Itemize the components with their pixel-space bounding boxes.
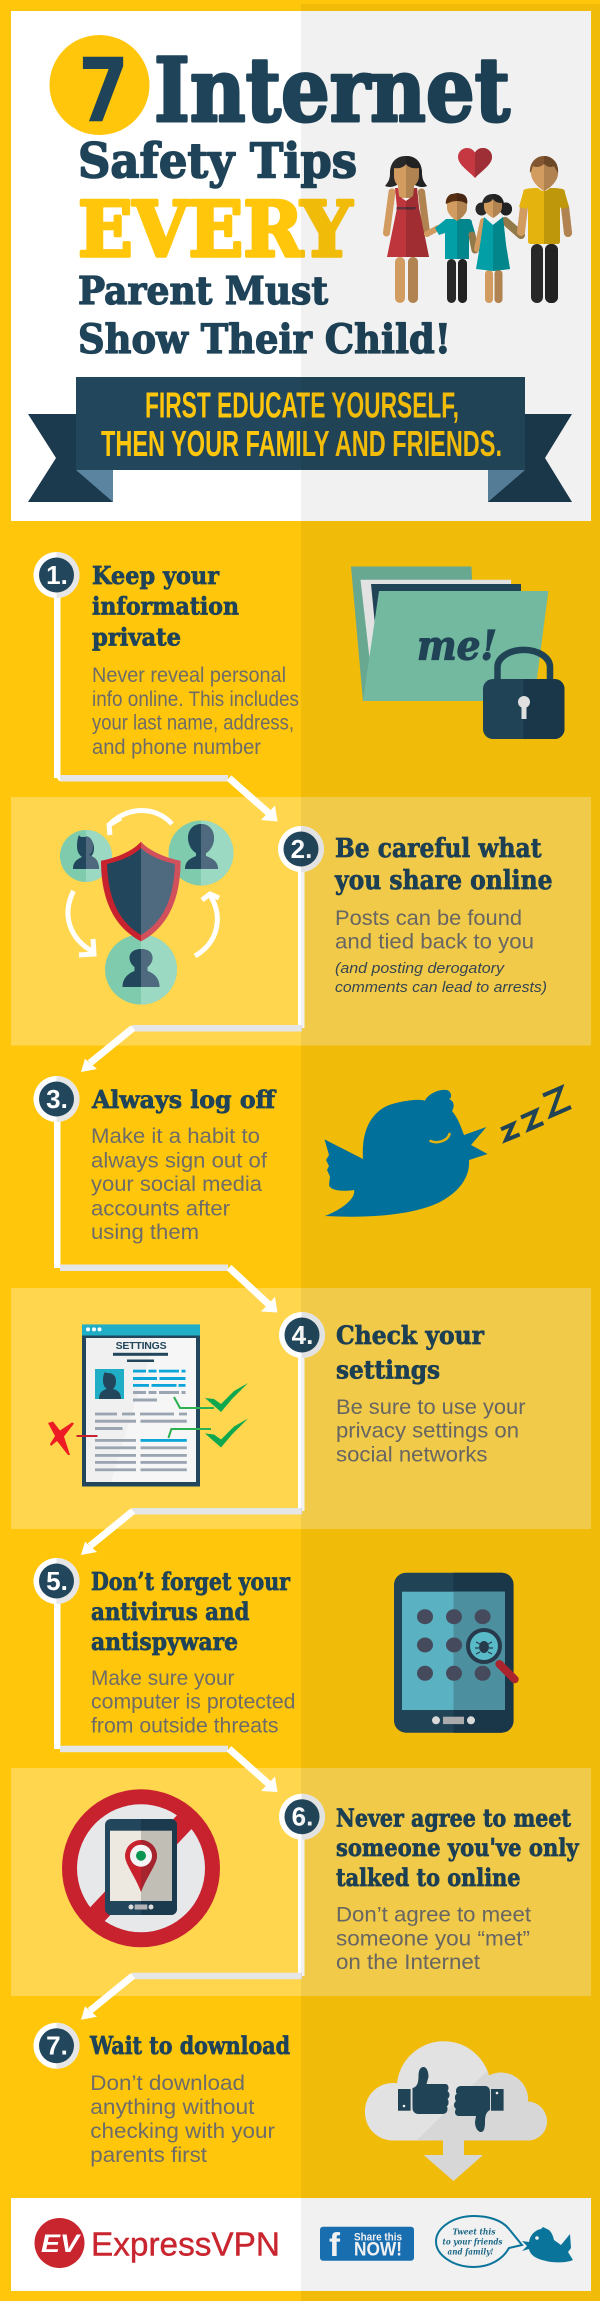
number badge 6: 6. bbox=[292, 1802, 313, 1832]
arrow: tip 4 to 5 bbox=[81, 1350, 304, 1555]
body text: your social media bbox=[91, 1173, 262, 1196]
body text: Make it a habit to bbox=[91, 1125, 260, 1148]
tip 4 bbox=[48, 1312, 526, 1486]
tip 7 bbox=[34, 2023, 560, 2181]
body text: computer is protected bbox=[91, 1691, 296, 1714]
body text: on the Internet bbox=[336, 1951, 480, 1974]
number badge 7: 7. bbox=[46, 2031, 68, 2061]
title: EVERY bbox=[78, 185, 353, 274]
heading: Don’t forget your bbox=[91, 1567, 290, 1596]
zzz bbox=[501, 1088, 571, 1140]
tip 1 bbox=[34, 552, 564, 759]
body text: using them bbox=[91, 1221, 199, 1244]
heading: Be careful what bbox=[335, 834, 542, 864]
body text: Never reveal personal bbox=[92, 664, 286, 687]
title: Parent Must bbox=[78, 268, 328, 313]
number badge 6 bbox=[279, 1794, 325, 1840]
heading bbox=[336, 1321, 485, 1384]
icon: tablet with magnifier bbox=[394, 1573, 515, 1733]
body text bbox=[91, 1667, 296, 1738]
panel: tip 6 background bbox=[11, 1768, 591, 1996]
icon: shield and users bbox=[60, 810, 234, 1004]
body text bbox=[335, 907, 547, 996]
speech bubble: tweet this: and family! bbox=[448, 2248, 494, 2258]
speech bubble: tweet this: to your friends bbox=[442, 2238, 503, 2248]
body text: and tied back to you bbox=[335, 930, 534, 954]
speech bubble: tweet this bbox=[436, 2216, 522, 2267]
body text bbox=[90, 2072, 275, 2167]
icon: twitter bird bbox=[522, 2227, 573, 2262]
title: Safety Tips bbox=[78, 134, 357, 190]
body text: from outside threats bbox=[91, 1715, 278, 1738]
tip 6 bbox=[62, 1789, 580, 1974]
panel: tip 4 background bbox=[11, 1288, 591, 1529]
number badge 3: 3. bbox=[46, 1084, 68, 1114]
number badge 2: 2. bbox=[291, 834, 312, 864]
heading bbox=[336, 1804, 580, 1892]
body text: your last name, address, bbox=[92, 712, 294, 734]
arrow: tip 2 to 3 bbox=[81, 865, 304, 1072]
icon: sleeping bird bbox=[324, 1088, 571, 1217]
heading: private bbox=[92, 622, 181, 652]
number badge 2 bbox=[278, 826, 324, 872]
icon: heart bbox=[458, 148, 492, 178]
panel: tip 2 background bbox=[11, 797, 591, 1046]
icon: family bbox=[385, 156, 569, 303]
title: Internet bbox=[154, 38, 510, 142]
heading: information bbox=[92, 592, 239, 620]
body text: (and posting derogatory bbox=[335, 960, 506, 977]
button: Facebook share bbox=[320, 2226, 414, 2263]
body text: accounts after bbox=[91, 1198, 230, 1220]
body text: Make sure your bbox=[91, 1667, 234, 1690]
heading: Check your bbox=[336, 1321, 485, 1350]
button: Facebook share: Share this bbox=[354, 2232, 402, 2244]
heading: you share online bbox=[334, 866, 552, 896]
ribbon banner bbox=[28, 377, 572, 502]
speech bubble: tweet this: Tweet this bbox=[452, 2227, 496, 2237]
body text: Don’t agree to meet bbox=[336, 1904, 531, 1927]
body text bbox=[336, 1904, 531, 1974]
number badge 4: 4. bbox=[292, 1320, 313, 1350]
number badge 4 bbox=[279, 1312, 325, 1358]
number badge 1: 1. bbox=[46, 560, 68, 590]
body text bbox=[336, 1396, 526, 1466]
body text: parents first bbox=[90, 2144, 207, 2167]
heading: talked to online bbox=[336, 1863, 520, 1892]
heading: Wait to download bbox=[89, 2031, 290, 2060]
body text bbox=[92, 664, 299, 759]
icon: folder and lock: me! bbox=[417, 622, 497, 670]
title bbox=[78, 38, 510, 363]
logo: ExpressVPN: EV bbox=[41, 2230, 82, 2258]
number badge: 7: 7 bbox=[78, 39, 129, 142]
number badge 5 bbox=[34, 1558, 80, 1604]
body text: Don’t download bbox=[90, 2072, 245, 2095]
body text: and phone number bbox=[92, 736, 261, 759]
right half shade bbox=[301, 4, 600, 2301]
body text: comments can lead to arrests) bbox=[335, 979, 547, 996]
body text bbox=[91, 1125, 267, 1244]
heading: settings bbox=[336, 1356, 440, 1384]
heading: Always log off bbox=[91, 1085, 276, 1114]
tip 5 bbox=[34, 1558, 515, 1738]
body text: social networks bbox=[336, 1444, 488, 1466]
icon: no location sharing sign bbox=[62, 1789, 220, 1947]
icon: folder and lock bbox=[351, 566, 564, 739]
number badge: 7 bbox=[50, 35, 150, 142]
icon: settings page bbox=[48, 1324, 248, 1486]
body text: privacy settings on bbox=[336, 1420, 519, 1442]
curved arrows bbox=[68, 810, 219, 956]
heading bbox=[92, 561, 239, 652]
arrow: tip 3 to 4 bbox=[54, 1110, 278, 1312]
button: Facebook share: f bbox=[329, 2226, 341, 2263]
body text: info online. This includes bbox=[92, 688, 299, 711]
tip 3 bbox=[34, 1076, 571, 1244]
title: Show Their Child! bbox=[78, 316, 451, 363]
body text: Be sure to use your bbox=[336, 1396, 526, 1419]
heading bbox=[334, 834, 552, 896]
footer panel bbox=[11, 2198, 591, 2291]
icon: settings page: SETTINGS bbox=[116, 1340, 167, 1352]
number badge 5: 5. bbox=[46, 1566, 68, 1596]
heading bbox=[91, 1567, 290, 1656]
arrow: tip 6 to 7 bbox=[81, 1830, 304, 2020]
body text: anything without bbox=[90, 2096, 255, 2119]
body text: checking with your bbox=[90, 2120, 275, 2143]
body text: Posts can be found bbox=[335, 907, 522, 930]
logo: ExpressVPN: ExpressVPN bbox=[91, 2227, 280, 2264]
number badge 3 bbox=[34, 1076, 80, 1122]
arrow: tip 1 to 2 bbox=[54, 590, 278, 822]
heading: antispyware bbox=[91, 1627, 238, 1656]
icon: cloud with thumbs bbox=[365, 2041, 560, 2181]
body text: always sign out of bbox=[91, 1150, 267, 1172]
number badge 1 bbox=[34, 552, 80, 598]
tip 2 bbox=[60, 810, 552, 1004]
heading: antivirus and bbox=[91, 1597, 250, 1626]
logo: ExpressVPN bbox=[34, 2218, 280, 2268]
header panel bbox=[11, 11, 591, 521]
body text: someone you “met” bbox=[336, 1928, 530, 1951]
button: Facebook share: NOW! bbox=[354, 2240, 402, 2261]
arrow: tip 5 to 6 bbox=[54, 1595, 278, 1792]
heading: Keep your bbox=[92, 561, 219, 590]
number badge 7 bbox=[34, 2023, 80, 2069]
